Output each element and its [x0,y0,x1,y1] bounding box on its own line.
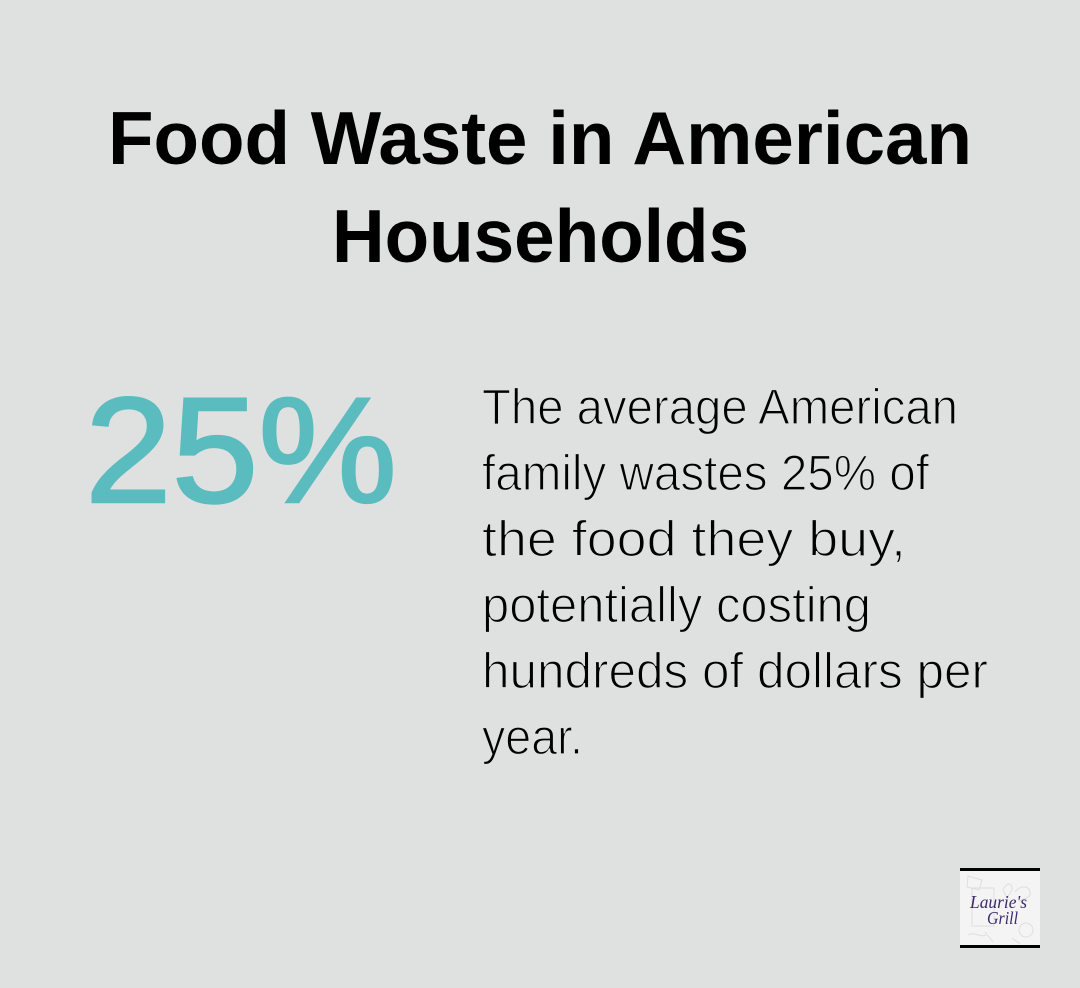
title [108,96,972,278]
description text block: potentially costing [482,577,871,633]
description text block: family wastes 25% of [482,445,929,501]
logo: Laurie's Grill: Laurie's [969,892,1027,912]
logo: Laurie's Grill [960,868,1040,948]
description text block: The average American [482,379,958,435]
title: Households [332,194,749,278]
description text block: year. [482,709,583,765]
big statistic: 25%: 25% [85,366,397,534]
logo: Laurie's Grill: Grill [987,908,1018,928]
description text block: hundreds of dollars per [482,643,988,699]
title: Food Waste in American [108,96,972,180]
description text block [482,379,988,765]
description text block: the food they buy, [482,511,906,567]
